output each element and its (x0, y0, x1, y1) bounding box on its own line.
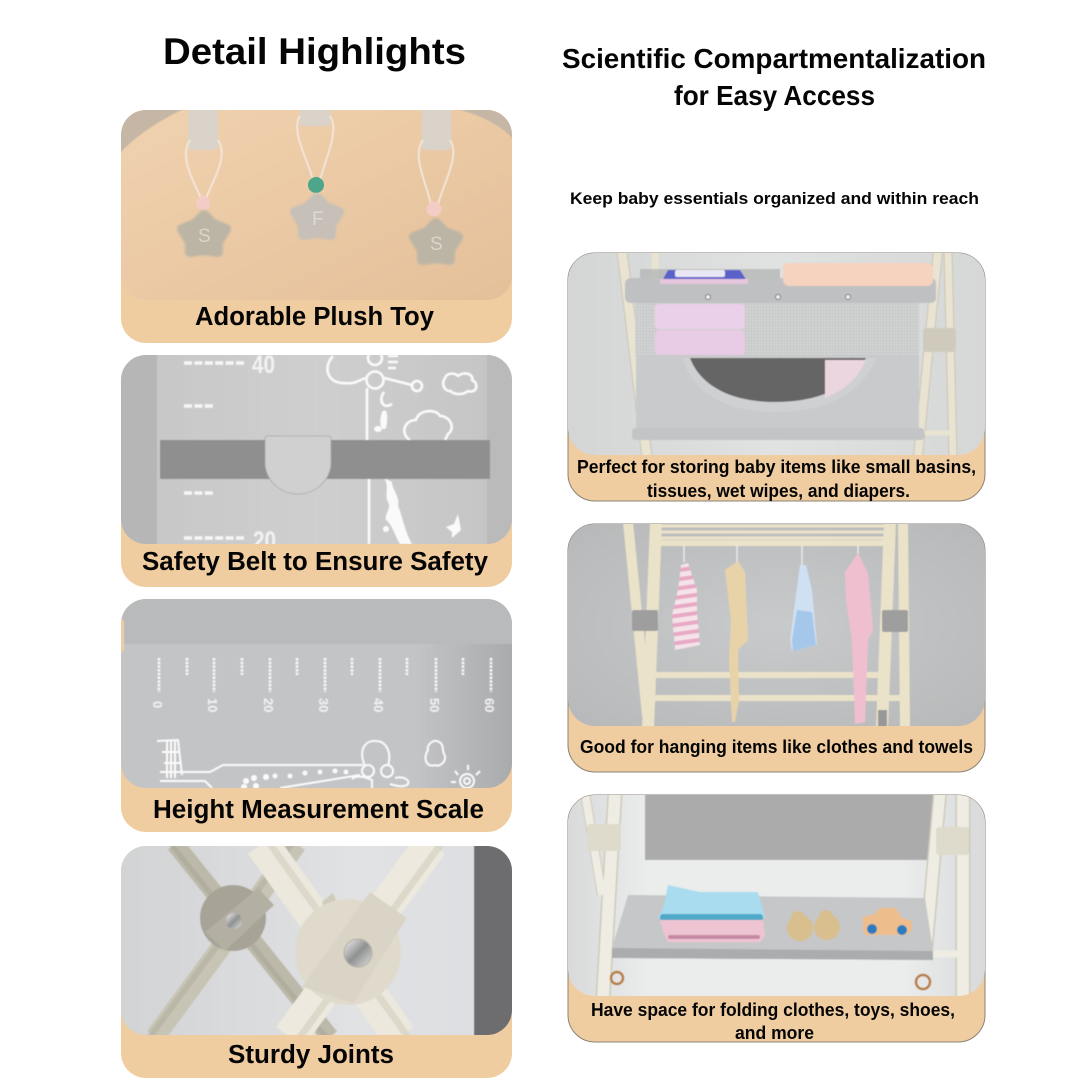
toy: star S: S (198, 226, 211, 247)
shelf (612, 895, 933, 960)
garment: beige (725, 561, 748, 722)
casters (611, 972, 930, 989)
pink tray (783, 263, 933, 286)
photo: measurement ruler: 50 (427, 698, 442, 712)
toy car (863, 908, 912, 935)
lower fabric basket (636, 356, 919, 432)
caption: and more (735, 1022, 814, 1043)
safety strap (160, 440, 490, 479)
photo: safety belt and growth chart: 40 (252, 351, 275, 379)
caption: Good for hanging items like clothes and towels (580, 736, 973, 757)
photo: clothes on rail (566, 522, 987, 728)
caption: Perfect for storing baby items like small basins, (577, 456, 976, 477)
toy: star F: F (312, 209, 324, 230)
mesh panel (635, 303, 919, 356)
caption (577, 456, 976, 501)
photo: measurement ruler (119, 597, 514, 790)
photo: measurement ruler: 20 (261, 698, 276, 712)
basket rim (625, 278, 936, 303)
photo: shelf with folded clothes, shoes and toy (566, 793, 987, 998)
panel: bottom shelf (566, 793, 987, 1043)
wipes on top (660, 270, 748, 284)
photo: plush star toys (119, 108, 514, 302)
photo: safety belt and growth chart: 20 (253, 527, 276, 555)
basket opening (690, 358, 866, 402)
title: Detail Highlights: Detail Highlights (163, 31, 466, 72)
photo: measurement ruler: 0 (150, 701, 165, 708)
toy: star S (182, 196, 226, 252)
baby shoes (787, 910, 840, 941)
caption: Safety Belt to Ensure Safety (142, 548, 489, 576)
garment: pink stripe (672, 563, 700, 650)
photo: measurement ruler: 60 (482, 698, 497, 712)
panel: adorable plush toy (119, 108, 514, 343)
caption: Adorable Plush Toy (195, 303, 435, 331)
caption: Have space for folding clothes, toys, shoes, (591, 999, 955, 1020)
panel: safety belt (119, 351, 514, 587)
photo: measurement ruler: 30 (316, 698, 331, 712)
subheading: Keep baby essentials organized and within reach (570, 189, 979, 208)
toy: star S right: S (430, 234, 443, 255)
photo: safety belt and growth chart (119, 351, 514, 555)
garment: blue (790, 565, 817, 651)
folded clothes (658, 885, 765, 942)
photo: basket with wipes and tray (566, 251, 987, 457)
caption (591, 999, 955, 1043)
heading: Scientific Compartmentalization for Easy Access: Scientific Compartmentalization (562, 43, 986, 74)
heading: Scientific Compartmentalization for Easy Access (562, 43, 986, 111)
photo: measurement ruler: 40 (371, 698, 386, 712)
caption: Sturdy Joints (228, 1041, 394, 1069)
panel: hanging rail (566, 522, 987, 772)
panel: storage basket (566, 251, 987, 501)
buckle (265, 436, 331, 494)
caption: tissues, wet wipes, and diapers. (647, 480, 910, 501)
garment: pink long (845, 553, 873, 724)
toy: star F (295, 177, 339, 235)
front joint (262, 844, 441, 1037)
toy: star S right (414, 202, 458, 260)
back joint (150, 844, 330, 1037)
photo: folding frame joints (119, 844, 514, 1037)
wipes packs (655, 304, 745, 355)
photo: measurement ruler: 10 (205, 698, 220, 712)
heading: Scientific Compartmentalization for Easy Access: for Easy Access (674, 80, 875, 111)
panel: height measurement scale (119, 597, 514, 832)
caption: Height Measurement Scale (153, 796, 484, 824)
panel: sturdy joints (119, 844, 514, 1078)
